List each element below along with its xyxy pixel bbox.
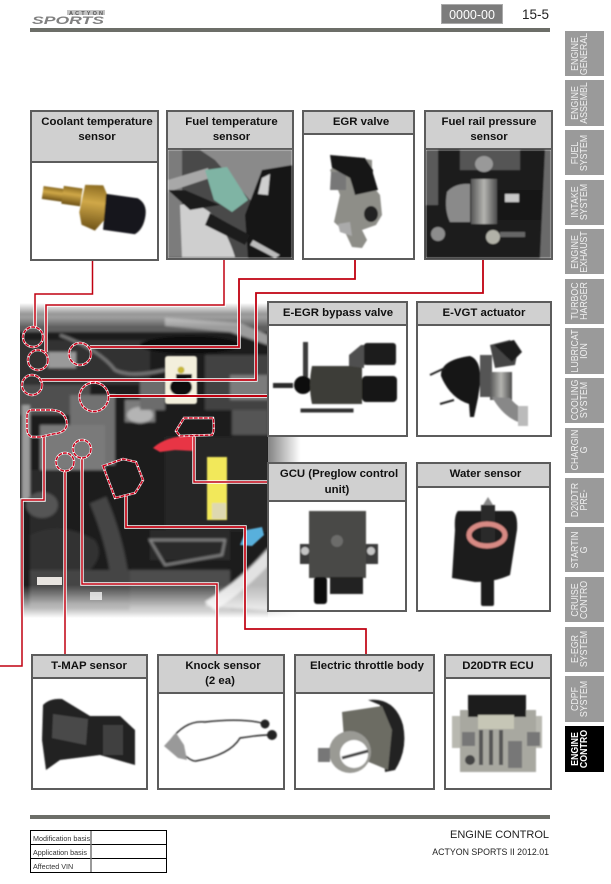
side navigation tabs: ENGINE bbox=[569, 732, 581, 766]
header: fuel temperature sensor bbox=[167, 111, 293, 149]
side navigation tabs: STARTIN bbox=[569, 532, 581, 568]
side navigation tabs: SYSTEM bbox=[578, 382, 590, 418]
engine bay photo bbox=[20, 304, 298, 617]
side navigation tabs: ENGINE bbox=[569, 86, 581, 120]
header: EGR valve bbox=[303, 111, 414, 134]
panel: fuel rail pressure sensor bbox=[425, 111, 552, 259]
side navigation tabs: E-EGR bbox=[569, 635, 581, 663]
section code badge bbox=[442, 4, 502, 24]
photo: fuel rail pressure sensor bbox=[426, 150, 551, 258]
icon: EGR valve bbox=[330, 155, 382, 248]
photo: fuel temperature sensor bbox=[168, 150, 292, 258]
header: water sensor: Water sensor bbox=[450, 468, 522, 480]
icon: water sensor bbox=[452, 497, 517, 606]
side navigation tabs: G bbox=[578, 547, 590, 553]
header: D20DTR ECU: D20DTR ECU bbox=[462, 660, 534, 672]
warning sticker bbox=[37, 577, 62, 585]
header: coolant temperature sensor bbox=[31, 111, 158, 162]
panel: E-VGT actuator bbox=[417, 302, 551, 436]
icon: ECU bbox=[452, 695, 542, 772]
side navigation tabs: HARGER bbox=[578, 282, 590, 320]
header: coolant temperature sensor: sensor bbox=[78, 131, 116, 143]
section code badge: 0000-00 bbox=[449, 8, 495, 22]
side navigation tabs bbox=[565, 31, 604, 772]
side navigation tabs: ENGINE bbox=[569, 235, 581, 269]
side navigation tabs: ENGINE bbox=[569, 37, 581, 71]
header: T-MAP sensor: T-MAP sensor bbox=[51, 660, 127, 672]
header: fuel rail pressure sensor: Fuel rail pressure bbox=[442, 116, 536, 128]
side navigation tabs: SYSTEM bbox=[578, 135, 590, 171]
side navigation tabs: CRUISE bbox=[569, 583, 581, 617]
panel: electric throttle body bbox=[295, 655, 434, 789]
side navigation tabs: FUEL bbox=[569, 142, 581, 164]
panel: T-MAP sensor bbox=[32, 655, 147, 789]
side navigation tabs: G bbox=[578, 447, 590, 453]
header: GCU preglow control unit bbox=[268, 463, 406, 501]
side navigation tabs: ASSEMBL bbox=[578, 82, 590, 124]
panel: GCU preglow control unit bbox=[268, 463, 406, 611]
header logo: SPORTS bbox=[32, 15, 105, 27]
icon: bypass valve bbox=[273, 342, 397, 411]
coolant reservoir bbox=[165, 356, 197, 404]
blue washer cap bbox=[240, 527, 264, 546]
header: E-VGT actuator: E-VGT actuator bbox=[443, 307, 526, 319]
side navigation tabs: SYSTEM bbox=[578, 631, 590, 667]
header: knock sensor: (2 ea) bbox=[205, 675, 235, 687]
side navigation tabs: CONTRO bbox=[578, 580, 590, 619]
side navigation tabs: CONTRO bbox=[578, 729, 590, 768]
panel: E-EGR bypass valve bbox=[268, 302, 407, 436]
footer rule bbox=[30, 815, 550, 819]
header: water sensor bbox=[417, 463, 550, 487]
icon: coolant sensor bbox=[38, 177, 149, 237]
side navigation tabs: LUBRICAT bbox=[569, 330, 581, 372]
header logo: ACTYON bbox=[69, 11, 103, 17]
header: E-EGR bypass valve: E-EGR bypass valve bbox=[283, 307, 393, 319]
panel: coolant temperature sensor bbox=[31, 111, 158, 260]
header: GCU preglow control unit: unit) bbox=[325, 484, 350, 496]
panel: fuel temperature sensor bbox=[167, 111, 293, 259]
icon: GCU bbox=[300, 511, 378, 604]
side navigation tabs: COOLING bbox=[569, 380, 581, 420]
icon: throttle body bbox=[318, 700, 404, 773]
icon: knock sensor bbox=[164, 720, 277, 761]
header: coolant temperature sensor: Coolant temperature bbox=[41, 116, 153, 128]
side navigation tabs: EXHAUST bbox=[578, 231, 590, 273]
header logo bbox=[32, 10, 105, 27]
panel: D20DTR ECU bbox=[445, 655, 551, 789]
side navigation tabs: D20DTR bbox=[569, 483, 581, 517]
header: fuel temperature sensor: Fuel temperature bbox=[185, 116, 278, 128]
header: knock sensor bbox=[158, 655, 284, 693]
side navigation tabs: CDPF bbox=[569, 687, 581, 711]
footer section title: ENGINE CONTROL bbox=[450, 829, 549, 841]
side navigation tabs: TURBOC bbox=[569, 282, 581, 320]
battery label bbox=[207, 457, 227, 520]
header: fuel rail pressure sensor: sensor bbox=[470, 131, 508, 143]
side navigation tabs: GENERAL bbox=[578, 32, 590, 75]
side navigation tabs: SYSTEM bbox=[578, 184, 590, 220]
panel: EGR valve bbox=[303, 111, 414, 259]
page number: 15-5 bbox=[522, 7, 549, 22]
side navigation tabs: INTAKE bbox=[569, 186, 581, 218]
red battery cover bbox=[153, 435, 195, 452]
side navigation tabs: PRE- bbox=[578, 489, 590, 511]
callout leader lines bbox=[0, 260, 483, 666]
side navigation tabs: CHARGIN bbox=[569, 430, 581, 470]
side navigation tabs: SYSTEM bbox=[578, 681, 590, 717]
footer model text: ACTYON SPORTS II 2012.01 bbox=[432, 847, 549, 857]
side navigation tabs: ION bbox=[578, 343, 590, 359]
revision table bbox=[30, 830, 166, 872]
panel: water sensor bbox=[417, 463, 550, 611]
header: knock sensor: Knock sensor bbox=[185, 660, 261, 672]
header: electric throttle body: Electric throttle body bbox=[310, 660, 425, 672]
revision table: Application basis bbox=[33, 848, 87, 857]
callout markers on photo bbox=[22, 327, 214, 498]
revision table: Modification basis bbox=[33, 834, 91, 843]
icon: E-VGT actuator bbox=[430, 340, 528, 426]
header rule bbox=[30, 28, 550, 32]
header: GCU preglow control unit: GCU (Preglow control bbox=[280, 468, 398, 480]
header: EGR valve: EGR valve bbox=[333, 116, 389, 128]
panel: knock sensor bbox=[158, 655, 284, 789]
header: fuel rail pressure sensor bbox=[425, 111, 552, 149]
icon: T-MAP sensor bbox=[42, 699, 135, 770]
revision table: Affected VIN bbox=[33, 862, 73, 871]
header: fuel temperature sensor: sensor bbox=[213, 131, 251, 143]
